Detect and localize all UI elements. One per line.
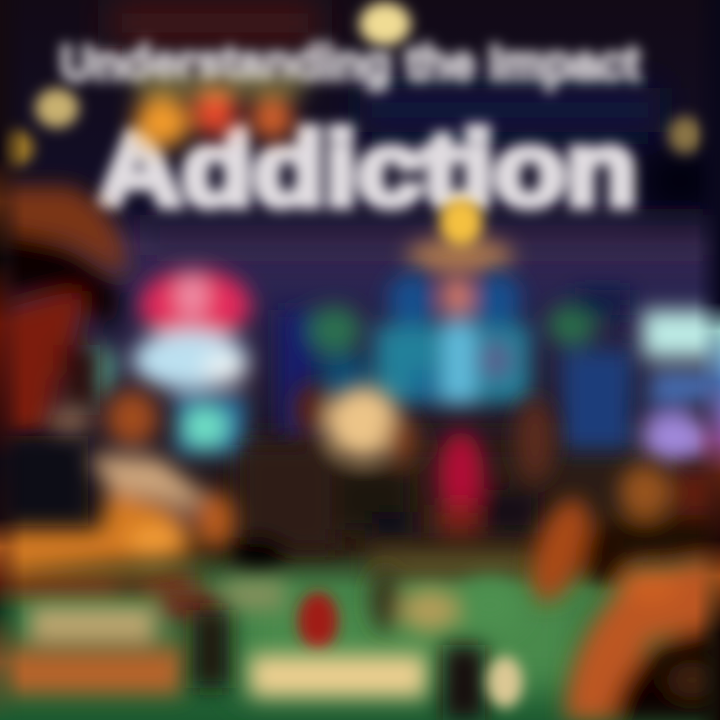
star <box>439 198 483 246</box>
title: Understanding the Impact <box>60 35 640 91</box>
hair and head <box>0 186 128 440</box>
right edge tone <box>696 0 720 720</box>
dark clothing <box>0 436 88 526</box>
tan oval card <box>487 656 523 708</box>
dark chip right <box>443 645 485 720</box>
right screen <box>640 310 720 462</box>
right figure <box>518 464 720 720</box>
center blue panels <box>278 274 632 450</box>
table chips and cards <box>0 568 524 720</box>
ceiling lights <box>0 2 702 166</box>
title <box>60 35 640 228</box>
dealer and crowd <box>230 384 555 576</box>
hand and arm <box>0 390 235 598</box>
star sign <box>406 198 514 275</box>
left figure <box>0 186 235 598</box>
title: Addiction <box>97 110 637 228</box>
title decorations <box>134 82 305 148</box>
sign board <box>406 237 514 275</box>
left edge tone <box>0 0 24 720</box>
dark chip left <box>193 610 229 688</box>
red chip <box>298 592 338 650</box>
balloon cluster <box>61 269 251 455</box>
card row <box>250 655 426 697</box>
center table glow <box>370 568 524 633</box>
left cards <box>0 580 285 694</box>
